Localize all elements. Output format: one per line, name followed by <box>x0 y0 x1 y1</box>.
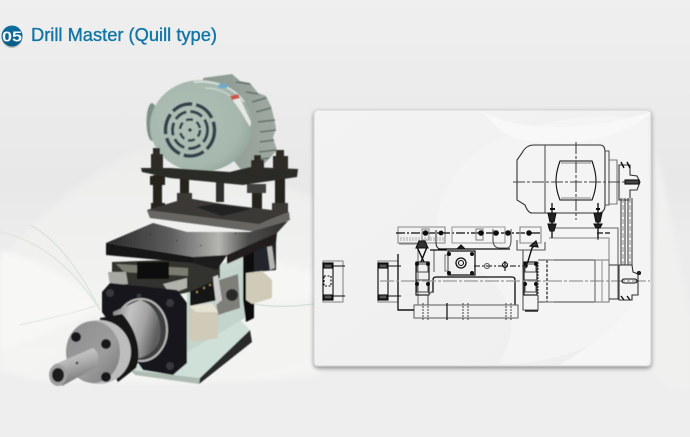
drawing: top rail <box>396 227 545 250</box>
panel wave decoration <box>437 110 650 365</box>
drawing: motor outline <box>513 142 640 220</box>
heading text: Drill Master (Quill type) <box>31 25 217 45</box>
panel: technical drawing <box>314 110 651 366</box>
nose bolts <box>71 332 111 382</box>
number badge: 05 <box>2 28 22 46</box>
quill barrel <box>100 299 167 382</box>
slide block and rails <box>108 258 220 296</box>
upper bolts <box>151 148 288 175</box>
limit switches and lever <box>189 271 272 342</box>
mechanical line drawing <box>323 142 650 320</box>
drawing: central gearbox <box>445 245 530 275</box>
drawing: end flange <box>323 261 345 302</box>
product photo: drill master unit <box>49 74 298 386</box>
flange bolts <box>106 289 174 370</box>
black column and right side hardware <box>190 234 276 322</box>
drawing: lower slide <box>398 277 518 320</box>
motor nameplate <box>218 84 251 127</box>
drawing: belt and pulleys <box>619 162 640 300</box>
drawing: centerline <box>380 280 650 282</box>
drawing: motor mount bolts <box>548 203 602 238</box>
drawing: quill cylinder <box>538 260 618 302</box>
lower studs <box>150 175 288 226</box>
intermediate plate <box>147 198 290 232</box>
quill nose <box>66 320 131 384</box>
motor fan cover vents <box>166 104 214 156</box>
base plate <box>130 258 252 384</box>
black spindle flange <box>102 283 187 375</box>
motor <box>146 74 277 175</box>
drawing: support column <box>548 228 618 298</box>
number badge <box>2 26 22 48</box>
title <box>2 25 217 48</box>
table plate <box>106 221 288 270</box>
motor mounting plate <box>141 167 298 185</box>
drawing: bearing columns <box>415 241 538 311</box>
drawing: spindle housing <box>378 244 418 310</box>
output shaft <box>49 348 99 386</box>
